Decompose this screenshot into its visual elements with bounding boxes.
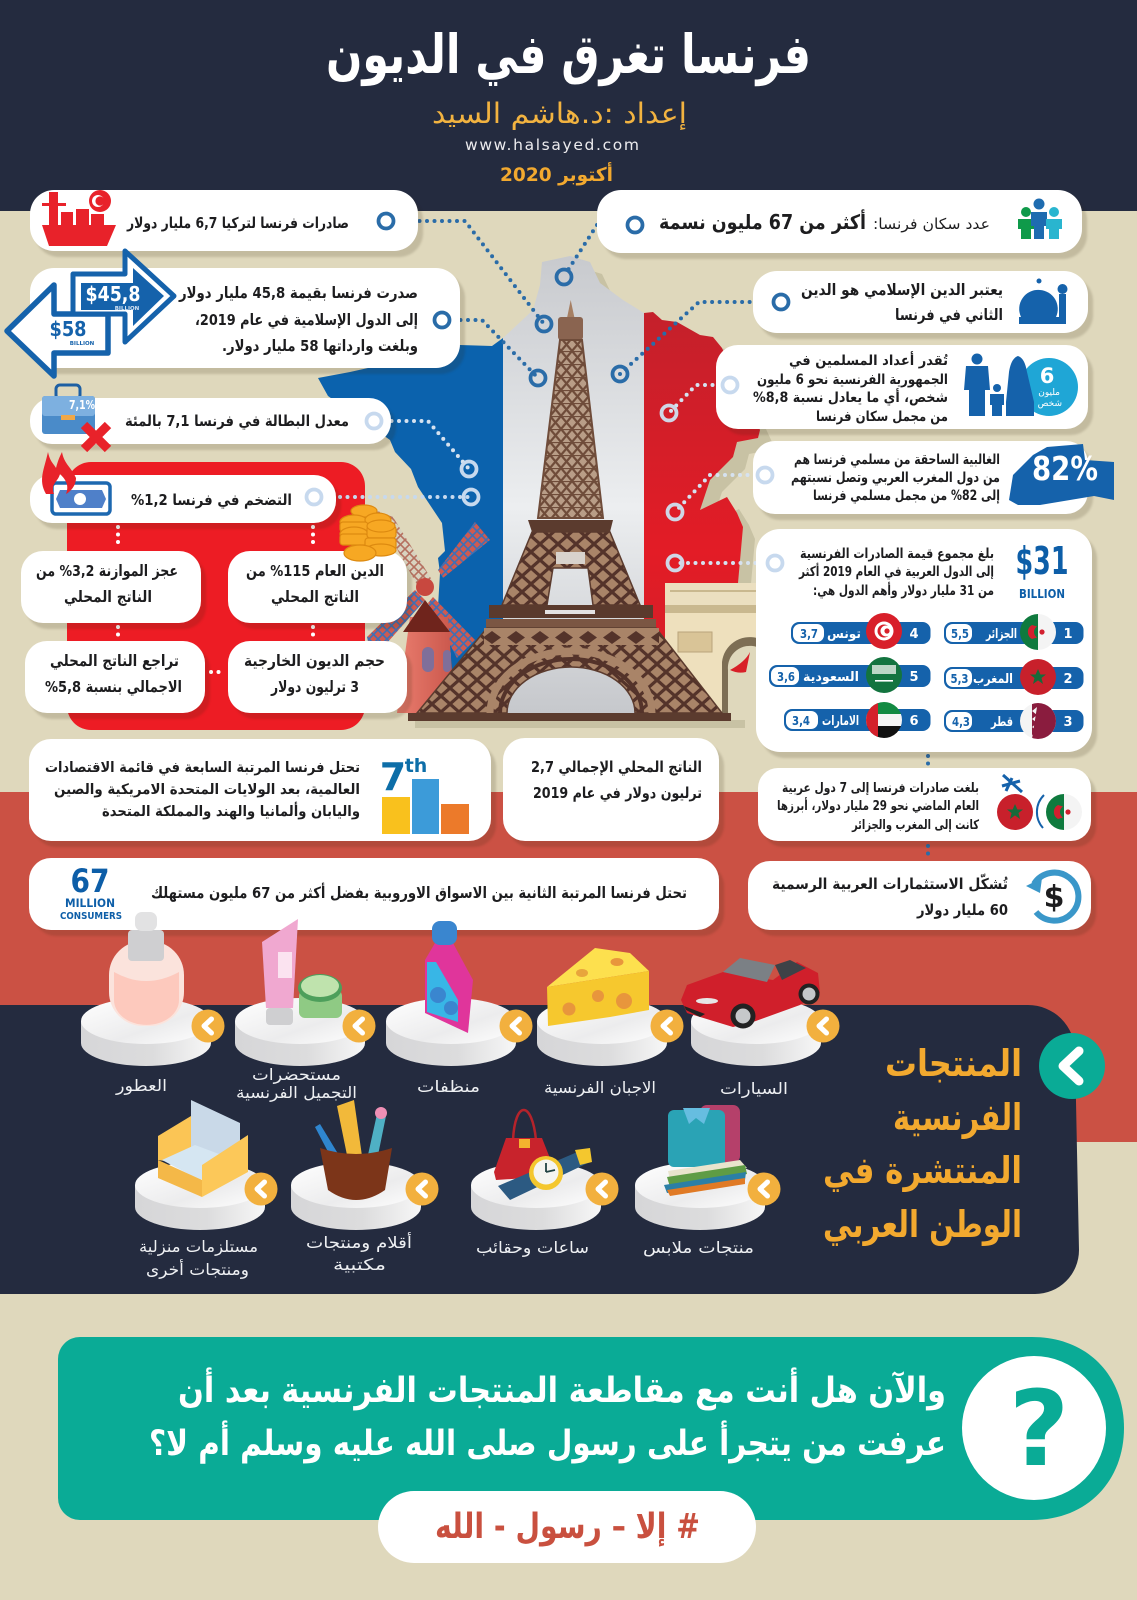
text: Islam second religion: يعتبر الدين الإسلامي هو الدين xyxy=(801,281,1003,300)
country: Saudi Arabia: 3,6 xyxy=(777,669,795,684)
chart: 7th bars: th xyxy=(405,755,427,777)
figure: $31 billion: $31 xyxy=(1016,539,1068,583)
text: exports to 7 Arab countries: بلغت صادرات فرنسا إلى 7 دول عربية xyxy=(782,781,979,796)
text: exports and imports: صدرت فرنسا بقيمة 45,8 مليار دولار xyxy=(178,284,418,302)
country: Qatar: قطر xyxy=(990,715,1013,730)
figure: 67 million consumers: 67 xyxy=(70,862,110,900)
text: exports and imports xyxy=(178,284,418,355)
text: public debt: الناتج المحلي xyxy=(271,588,359,607)
country: UAE: 3,4 xyxy=(792,713,810,728)
product: pens and stationery xyxy=(291,1100,438,1274)
icon: 6 million badge: 6 xyxy=(1040,364,1054,388)
icon: import arrow $58: $58 xyxy=(50,317,86,341)
text: Arab investments xyxy=(772,873,1008,919)
text: Muslims in France: من مجمل سكان فرنسا xyxy=(816,409,948,425)
section title: French products: المنتشرة في xyxy=(823,1149,1022,1192)
text: population figure: أكثر من 67 مليون نسمة xyxy=(659,208,866,234)
text: boycott question xyxy=(149,1367,946,1464)
text: Arab exports: من 31 مليار دولار وأهم الدول هي: xyxy=(813,582,994,599)
icon: handbag and watch xyxy=(494,1110,592,1200)
panel: exports to 7 Arab countries xyxy=(758,768,1091,841)
label: التجميل الفرنسية xyxy=(236,1083,357,1103)
panel: exports and imports with Islamic countries xyxy=(7,251,460,376)
country: Qatar: 3 xyxy=(1063,715,1073,730)
label xyxy=(236,1065,357,1103)
icon: tube and jar xyxy=(262,919,342,1025)
icon: detergent bottle xyxy=(425,921,473,1033)
panel: navy products section xyxy=(0,1005,1079,1294)
country: Tunisia: 3,7 xyxy=(800,626,818,641)
text: Muslims in France xyxy=(753,351,948,425)
text: Arab investments: تُشكّل الاستثمارات العربية الرسمية xyxy=(772,873,1008,893)
panel: Muslims in France xyxy=(716,345,1088,429)
label xyxy=(306,1232,412,1274)
text: seventh largest economy: واليابان وألمانيا والهند والمملكة المتحدة xyxy=(102,802,360,820)
icon: export arrow $45,8: $45,8 xyxy=(86,282,140,306)
section title: French products xyxy=(823,1042,1022,1246)
product: watches and bags xyxy=(471,1110,618,1258)
icon: flags and plane xyxy=(997,775,1082,830)
text: Arab exports: إلى الدول العربية في العام 2019 أكثر xyxy=(798,563,994,580)
panel: Arab investments xyxy=(748,861,1091,930)
country: Saudi Arabia xyxy=(769,657,930,693)
label: أقلام ومنتجات xyxy=(306,1232,412,1253)
icon: import arrow $58: BILLION xyxy=(70,341,95,347)
country: Saudi Arabia: 5 xyxy=(909,670,919,685)
label: منتجات ملابس xyxy=(643,1238,754,1258)
icon: mosque xyxy=(1019,278,1068,324)
panel: Islam second religion xyxy=(753,271,1088,333)
section title: French products: المنتجات xyxy=(885,1042,1022,1085)
text: boycott question: والآن هل أنت مع مقاطعة المنتجات الفرنسية بعد أن xyxy=(178,1367,946,1411)
icon: stacked shirts xyxy=(664,1105,747,1196)
chart: 7th bars xyxy=(380,755,469,834)
icon: 6 million badge: مليون xyxy=(1038,388,1060,398)
product: clothing xyxy=(635,1105,780,1258)
text: GDP xyxy=(531,758,702,802)
connector dots to the map xyxy=(118,221,928,858)
country: Algeria: الجزائر xyxy=(985,627,1017,642)
marker ring xyxy=(378,214,394,228)
text: GDP decline: تراجع الناتج المحلي xyxy=(50,652,179,671)
text: exports to Turkey: صادرات فرنسا لتركيا 6,7 مليار دولار xyxy=(126,214,349,232)
text: exports to 7 Arab countries: كانت إلى المغرب والجزائر xyxy=(851,818,979,833)
icon: perfume bottle xyxy=(109,912,184,1026)
country: Tunisia xyxy=(791,613,930,649)
icon: Maghreb map with 82% xyxy=(1009,444,1114,505)
product: detergents xyxy=(386,921,532,1096)
text: GDP decline: الاجمالي بنسبة 5,8% xyxy=(45,678,182,697)
country: Tunisia: 4 xyxy=(909,627,919,642)
marker ring xyxy=(628,218,642,232)
label: مكتبية xyxy=(333,1255,386,1274)
product: cars xyxy=(681,958,840,1099)
label: منظفات xyxy=(417,1077,480,1096)
icon: 6 million badge xyxy=(1020,358,1078,416)
section title: French products: الوطن العربي xyxy=(823,1203,1022,1246)
icon: pencil cup xyxy=(315,1100,392,1200)
country: Saudi Arabia: السعودية xyxy=(803,670,859,685)
text: Arab exports xyxy=(798,546,994,599)
icon: family of three xyxy=(1018,198,1062,239)
section title: French products: الفرنسية xyxy=(893,1096,1022,1139)
text: exports and imports: إلى الدول الإسلامية في عام 2019، xyxy=(195,311,418,330)
text: budget deficit: عجز الموازنة 3,2% من xyxy=(36,562,178,580)
country: Morocco xyxy=(944,659,1084,695)
figure: 67 million consumers xyxy=(60,862,122,922)
product: cosmetics xyxy=(235,919,376,1103)
country: UAE xyxy=(784,702,930,738)
label: مستحضرات xyxy=(252,1065,341,1085)
label xyxy=(139,1237,258,1280)
background: red band xyxy=(0,792,1137,1142)
panel: Arab exports $31 billion xyxy=(756,529,1092,752)
text: inflation: التضخم في فرنسا 1,2% xyxy=(131,491,292,509)
label: ساعات وحقائب xyxy=(476,1238,589,1258)
icon: red convertible xyxy=(681,958,820,1028)
text: second European market: تحتل فرنسا المرتبة الثانية بين الاسواق الاوروبية بفضل أكثر من 67 مليون مستهلك xyxy=(151,883,687,902)
website: www.halsayed.com xyxy=(465,136,639,154)
text: GDP: الناتج المحلي الإجمالي 2,7 xyxy=(531,758,702,776)
icon: teal chevron xyxy=(1039,1033,1105,1099)
label: السيارات xyxy=(720,1079,788,1099)
marker ring xyxy=(306,490,322,504)
country: Morocco: المغرب xyxy=(973,672,1013,687)
icon: question mark xyxy=(962,1356,1106,1500)
country: Morocco: 2 xyxy=(1063,672,1073,687)
country: Qatar: 4,3 xyxy=(952,714,970,729)
country: UAE: 6 xyxy=(909,714,919,729)
hashtag pill xyxy=(378,1491,756,1563)
panel: external debt xyxy=(228,641,407,713)
country: Morocco: 5,3 xyxy=(950,671,968,686)
text: boycott question: عرفت من يتجرأ على رسول صلى الله عليه وسلم أم لا؟ xyxy=(149,1420,946,1464)
text: external debt: حجم الديون الخارجية xyxy=(244,652,385,670)
marker ring xyxy=(434,312,450,328)
text: budget deficit: الناتج المحلي xyxy=(64,588,152,607)
panel: seventh largest economy xyxy=(29,739,491,841)
text: public debt: الدين العام 115% من xyxy=(246,562,384,580)
icon: export arrow $45,8: BILLION xyxy=(115,306,140,312)
panel: public debt xyxy=(228,551,407,623)
icon: armchair xyxy=(158,1100,248,1197)
country: Algeria xyxy=(944,614,1084,650)
icon: import arrow $58 xyxy=(7,285,108,376)
illustration: Eiffel Tower xyxy=(408,300,745,728)
product: perfumes xyxy=(81,912,224,1096)
text: external debt: 3 ترليون دولار xyxy=(270,678,359,696)
text: GDP: ترليون دولار في عام 2019 xyxy=(533,784,702,802)
text: seventh largest economy xyxy=(45,760,360,820)
map marker rings xyxy=(462,270,682,570)
panel: population xyxy=(597,190,1082,253)
text: exports to 7 Arab countries xyxy=(777,781,979,833)
label: ومنتجات أخرى xyxy=(146,1259,249,1280)
marker ring xyxy=(758,468,772,482)
date: أكتوبر 2020 xyxy=(500,162,613,186)
text: GDP decline xyxy=(45,652,182,697)
title: فرنسا تغرق في الديون xyxy=(326,23,811,86)
icon: gold coins xyxy=(340,505,396,561)
icon: Muslim family xyxy=(964,354,1034,416)
figure: $31 billion: BILLION xyxy=(1019,586,1065,601)
hashtag pill: # إلا – رسول - الله xyxy=(435,1507,700,1547)
text: external debt xyxy=(244,652,385,696)
panel: call to action xyxy=(58,1337,1124,1563)
country: UAE: الامارات xyxy=(822,714,859,729)
figure: 67 million consumers: CONSUMERS xyxy=(60,911,122,922)
panel: GDP xyxy=(503,738,719,841)
country: Algeria: 5,5 xyxy=(951,626,969,641)
text: Muslims in France: شخص، أي ما يعادل نسبة 8,8% xyxy=(753,388,948,407)
marker ring xyxy=(366,414,382,428)
marker ring xyxy=(768,556,782,570)
illustration: Arc de Triomphe xyxy=(665,583,757,713)
country: Qatar xyxy=(944,703,1084,739)
icon: burning banknote xyxy=(42,452,110,514)
header band xyxy=(0,0,1137,211)
illustration: Moulin Rouge windmill xyxy=(367,510,490,713)
label: مستلزمات منزلية xyxy=(139,1237,258,1257)
icon: Maghreb map with 82%: 82% xyxy=(1032,449,1098,488)
marker ring xyxy=(722,378,738,392)
product: home goods xyxy=(135,1100,278,1280)
chart: 7th bars: 7 xyxy=(380,755,406,799)
text: unemployment: معدل البطالة في فرنسا 7,1 بالمئة xyxy=(125,412,349,430)
panel: exports to Turkey xyxy=(30,190,418,251)
panel: red debt block xyxy=(67,462,365,730)
text: Muslims in France: الجمهورية الفرنسية نحو 6 مليون xyxy=(757,372,948,388)
author: إعداد :د.هاشم السيد xyxy=(432,97,687,130)
panel: budget deficit xyxy=(21,551,201,623)
text: Muslims in France: تُقدر أعداد المسلمين في xyxy=(789,351,948,369)
text: Maghreb share: إلى 82% من مجمل مسلمي فرنسا xyxy=(813,488,1000,504)
icon: 6 million badge: شخص xyxy=(1038,399,1062,409)
text: seventh largest economy: تحتل فرنسا المرتبة السابعة في قائمة الاقتصادات xyxy=(45,760,360,776)
map of France in flag colours xyxy=(318,256,772,725)
text: public debt xyxy=(246,562,384,607)
text: exports to 7 Arab countries: العام الماضي نحو 29 مليار دولار، أبرزها xyxy=(777,797,979,814)
text: Islam second religion xyxy=(801,281,1003,325)
text: budget deficit xyxy=(36,562,178,607)
text: seventh largest economy: العالمية، بعد الولايات المتحدة الامريكية والصين xyxy=(54,782,360,798)
text: Arab investments: 60 مليار دولار xyxy=(916,901,1008,919)
text: Maghreb share xyxy=(791,452,1000,504)
icon: export arrow $45,8 xyxy=(73,251,174,342)
icon: dollar cycle xyxy=(1026,873,1078,921)
country: Algeria: 1 xyxy=(1063,627,1073,642)
marker ring xyxy=(774,294,788,310)
text: Maghreb share: من دول المغرب العربي وتصل نسبتهم xyxy=(791,470,1000,486)
text: population label: عدد سكان فرنسا: xyxy=(873,215,990,233)
label: العطور xyxy=(115,1076,167,1096)
text: Maghreb share: الغالبية الساحقة من مسلمي فرنسا هم xyxy=(794,452,1000,468)
icon: red ship with Turkish flag xyxy=(42,190,116,246)
figure: 67 million consumers: MILLION xyxy=(65,896,115,910)
panel: second European market xyxy=(29,858,719,930)
text: Arab exports: بلغ مجموع قيمة الصادرات الفرنسية xyxy=(800,546,994,562)
icon: dollar cycle: $ xyxy=(1044,880,1064,915)
panel: inflation xyxy=(30,452,336,523)
label: الاجبان الفرنسية xyxy=(544,1078,656,1098)
icon: cheese wedge xyxy=(547,948,649,1026)
product: French cheese xyxy=(537,948,684,1098)
text: exports and imports: وبلغت وارداتها 58 مليار دولار. xyxy=(222,337,418,355)
country: Tunisia: تونس xyxy=(827,627,861,642)
panel: Maghreb share xyxy=(753,441,1114,514)
panel: GDP decline xyxy=(25,641,205,713)
figure: $31 billion xyxy=(1016,539,1068,601)
icon: briefcase with red cross: 7,1% xyxy=(69,397,95,412)
icon: question mark: ? xyxy=(1009,1368,1069,1490)
text: Islam second religion: الثاني في فرنسا xyxy=(895,306,1003,325)
panel: unemployment xyxy=(30,385,391,449)
icon: briefcase with red cross xyxy=(42,385,108,449)
